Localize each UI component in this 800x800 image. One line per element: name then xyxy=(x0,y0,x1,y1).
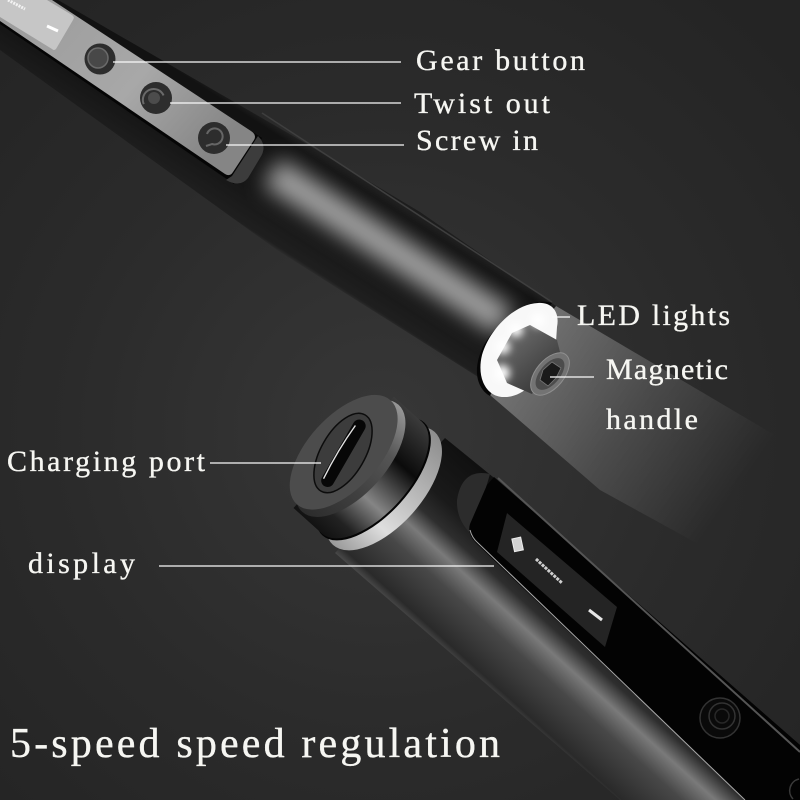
battery icon xyxy=(512,537,523,552)
label: display: display xyxy=(28,547,135,580)
leader lines xyxy=(113,62,594,566)
button panel xyxy=(0,0,264,184)
label: handle: handle xyxy=(606,403,698,436)
cap chamfer xyxy=(275,381,425,536)
cap face xyxy=(270,376,417,528)
LED glow points xyxy=(494,313,545,381)
inner recess xyxy=(497,325,560,394)
shoulder behind display xyxy=(457,473,490,535)
twist out button xyxy=(140,82,172,114)
lower body cylinder xyxy=(335,438,800,800)
gear button xyxy=(84,44,116,74)
label: magnetic: Magnetic xyxy=(606,353,728,386)
LED ring xyxy=(477,302,577,402)
lower screwdriver xyxy=(266,372,800,800)
speed icon xyxy=(536,559,562,583)
screen xyxy=(497,513,617,647)
light beam from LED ring xyxy=(490,306,800,600)
dark buttons xyxy=(700,698,740,738)
bit icon xyxy=(589,610,602,620)
black collar seam xyxy=(296,398,451,560)
title: 5-speed speed regulation: 5-speed speed regulation xyxy=(10,721,500,767)
ring shadow edge xyxy=(477,302,552,396)
label: screw in: Screw in xyxy=(416,124,538,157)
cap side xyxy=(295,398,449,558)
body top edge line xyxy=(262,113,552,302)
label: gear button: Gear button xyxy=(416,44,585,77)
screen icon: dial xyxy=(8,0,25,9)
magnetic bit holder xyxy=(523,346,577,402)
second dark button xyxy=(790,779,799,799)
screw in button xyxy=(198,122,230,154)
body highlight xyxy=(272,172,505,322)
label: LED lights: LED lights xyxy=(577,299,730,332)
panel screen xyxy=(0,0,74,50)
label: charging port: Charging port xyxy=(7,445,206,478)
screen icon: bit xyxy=(47,26,58,31)
display edge highlights xyxy=(470,530,745,800)
label: twist out: Twist out xyxy=(414,87,551,120)
charging port xyxy=(302,404,384,502)
display strip xyxy=(469,477,800,800)
metal collar ring xyxy=(305,406,463,570)
panel housing end xyxy=(226,136,264,184)
cap and collar xyxy=(266,372,463,570)
upper screwdriver body xyxy=(0,0,577,402)
